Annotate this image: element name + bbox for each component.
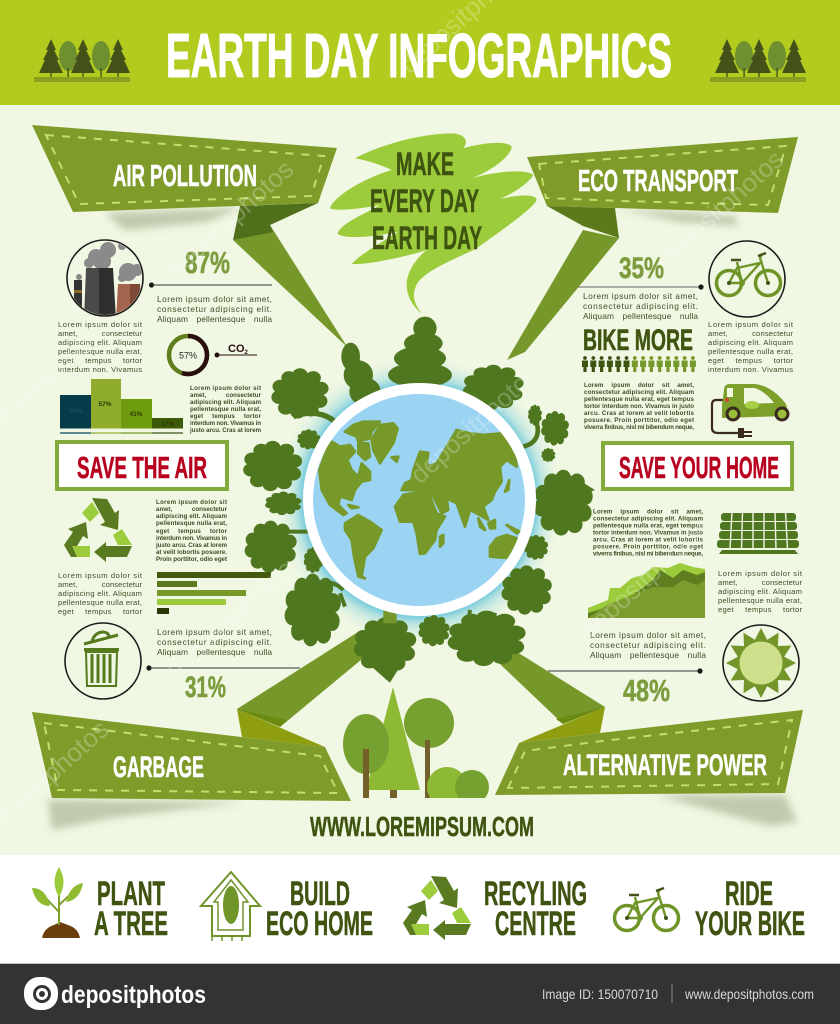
tree: left small — [265, 492, 302, 515]
leader line: 35% — [578, 284, 704, 290]
icon: bicycle circle — [709, 241, 785, 317]
text: recycle paragraph: Proin porttitor, odio eget — [156, 556, 227, 563]
text: garbage stat paragraph — [157, 627, 272, 657]
text: bicycle side paragraph — [708, 320, 794, 374]
text: recycle paragraph: eget tempus tortor — [156, 528, 228, 535]
continents — [319, 422, 520, 578]
label: build eco home — [266, 875, 373, 943]
bar chart: air: 17% — [161, 421, 175, 428]
brand name: depositphotos — [61, 981, 206, 1009]
text: factory paragraph: Lorem ipsum dolor sit — [58, 320, 143, 329]
tree: bottom right wide — [448, 610, 526, 666]
text: garbage paragraph: amet, consectetur — [58, 580, 142, 589]
ribbon: alternative power tail — [480, 645, 605, 743]
text: CO2 paragraph: Lorem ipsum dolor sit — [190, 385, 261, 392]
text: home paragraph — [593, 508, 704, 558]
heading: bike more: BIKE MORE — [583, 324, 693, 357]
tree: upper left narrow — [341, 343, 381, 406]
text: power paragraph: Aliquam pellentesque nulla — [590, 650, 706, 660]
tree: right large — [534, 470, 595, 536]
label: build eco home: BUILD — [290, 875, 350, 913]
text: home paragraph: posuere. Proin porttitor, odio eget — [593, 544, 703, 550]
icon: recycle — [64, 498, 132, 562]
text: CO2 paragraph: amet, consectetur — [190, 392, 262, 399]
leader line: 31% — [146, 665, 300, 671]
banner: alternative power — [495, 710, 803, 795]
text: transport paragraph — [583, 291, 698, 321]
text: home paragraph: consectetur adipiscing elit. Aliquam — [593, 516, 703, 522]
text: garbage paragraph: eget tempus tortor — [58, 607, 142, 616]
watermarks: depositphotos — [159, 554, 299, 684]
banner: air pollution: AIR POLLUTION — [113, 158, 257, 193]
icon: trash can — [65, 623, 141, 699]
tree: right small — [523, 405, 569, 462]
tree: small bush left — [297, 429, 320, 449]
banner shadows — [48, 208, 797, 830]
stat: 31%: 31% — [185, 671, 226, 704]
slogan: EARTH DAY — [372, 220, 482, 256]
text: transport paragraph: consectetur adipiscing elit. — [583, 301, 698, 311]
bar chart: air: 57% — [98, 401, 112, 408]
tree: left large — [243, 441, 302, 491]
text: CO2 paragraph: eget tempus tortor — [190, 413, 262, 420]
leader line: 87% — [149, 282, 272, 288]
globe — [303, 383, 536, 616]
icon: header trees left — [34, 39, 130, 82]
text: chart side paragraph: adipiscing elit. Aliquam — [718, 587, 802, 596]
text: recycle paragraph: interdum non. Vivamus in — [156, 535, 227, 542]
tree: small lower left — [304, 547, 323, 573]
text: factory paragraph: interdum non. Vivamus — [58, 365, 142, 374]
icon: header trees right — [710, 39, 806, 82]
text: chart side paragraph: Lorem ipsum dolor sit — [718, 569, 803, 578]
text: air paragraph: Aliquam pellentesque nulla — [157, 314, 272, 324]
text: bike paragraph: consectetur adipiscing elit. Aliquam — [584, 389, 694, 396]
text: home paragraph: pellentesque nulla erat, eget tempus — [593, 522, 704, 530]
text: bike paragraph: Lorem ipsum dolor sit amet, — [584, 382, 694, 389]
text: bike paragraph: tortor interdum non. Vivamus in justo — [584, 403, 694, 410]
callout: save the air — [57, 442, 227, 489]
tree: upper left gnarled — [271, 368, 337, 423]
text: bicycle side paragraph: amet, consectetur — [708, 329, 793, 338]
text: transport paragraph: Lorem ipsum dolor sit amet, — [583, 291, 698, 301]
text: garbage paragraph: pellentesque nulla erat, — [58, 598, 142, 607]
text: air paragraph: Lorem ipsum dolor sit amet, — [157, 294, 272, 304]
forest ring around globe — [243, 317, 595, 683]
text: bike paragraph — [584, 382, 695, 431]
tree: upper right — [463, 365, 524, 410]
text: chart side paragraph: eget tempus tortor — [718, 605, 802, 614]
donut chart: 57%: 57% — [179, 350, 197, 360]
tree: bottom left gnarled — [285, 574, 345, 646]
icon: bike — [614, 888, 678, 930]
text: recycle paragraph: at velit lobortis posuere. — [156, 549, 227, 556]
text: air paragraph: consectetur adipiscing elit. — [157, 304, 272, 314]
text: recycle paragraph: Lorem ipsum dolor sit — [156, 499, 227, 506]
text: bicycle side paragraph: Lorem ipsum dolor sit — [708, 320, 794, 329]
icon: sun — [723, 625, 799, 701]
tree: small right — [524, 535, 548, 560]
leader line: 48% — [548, 668, 703, 674]
ribbon: air pollution tail — [233, 203, 365, 375]
text: bicycle side paragraph: adipiscing elit. Aliquam — [708, 338, 793, 347]
label: recycling centre: CENTRE — [495, 905, 576, 943]
text: CO2 paragraph: interdum non. Vivamus in — [190, 420, 261, 427]
text: chart side paragraph — [718, 569, 803, 614]
text: recycle paragraph: adipiscing elit. Aliquam — [156, 513, 227, 520]
watermarks — [0, 0, 789, 844]
panel: bottom action strip — [0, 855, 840, 963]
text: bike paragraph: viverra finibus, nisl mi bibendum neque, — [584, 424, 694, 431]
text: CO2 paragraph: pellentesque nulla erat, — [190, 406, 261, 413]
label: plant a tree: A TREE — [94, 905, 168, 943]
watermarks: depositphotos — [574, 514, 714, 644]
tree: bottom small — [418, 615, 450, 646]
label: ride your bike — [695, 875, 805, 943]
tree: lower right — [502, 565, 552, 615]
label: ride your bike: RIDE — [725, 875, 773, 913]
text: garbage stat paragraph: Lorem ipsum dolor sit amet, — [157, 627, 272, 637]
text: power paragraph — [590, 630, 706, 660]
text: bicycle side paragraph: interdum non. Vivamus — [708, 365, 793, 374]
text: transport paragraph: Aliquam pellentesque nulla — [583, 311, 698, 321]
icon: electric car — [712, 384, 790, 438]
label: CO2: 2 — [244, 350, 248, 356]
text: power paragraph: Lorem ipsum dolor sit amet, — [590, 630, 706, 640]
tree: lower left — [245, 521, 308, 573]
stat: 35%: 35% — [619, 252, 664, 285]
banner: garbage — [32, 712, 351, 801]
text: bike paragraph: pellentesque nulla erat, eget tempus — [584, 396, 695, 403]
bar chart: air — [60, 379, 183, 434]
text: CO2 paragraph — [189, 385, 262, 434]
callout: save the air: SAVE THE AIR — [77, 450, 207, 485]
text: recycle paragraph — [155, 499, 228, 563]
icon: solar panel — [717, 512, 799, 554]
label: plant a tree — [94, 875, 168, 943]
text: factory paragraph: pellentesque nulla erat, — [58, 347, 142, 356]
bar chart: air: 45% — [69, 408, 83, 415]
icon: eco home — [201, 872, 260, 941]
text: factory paragraph: adipiscing elit. Aliquam — [58, 338, 142, 347]
slogan — [370, 146, 482, 256]
text: recycle paragraph: justo arcu. Cras at lorem — [155, 542, 227, 549]
text: CO2 paragraph: adipiscing elit. Aliquam — [190, 399, 261, 406]
text: CO2 paragraph: justo arcu. Cras at lorem — [189, 427, 261, 434]
header band — [0, 0, 840, 105]
text: factory paragraph: amet, consectetur — [58, 329, 142, 338]
callout: save your home — [603, 443, 792, 489]
tree: bottom centre — [354, 610, 416, 683]
bar chart: horizontal — [157, 572, 271, 614]
pictogram: people row — [582, 356, 696, 372]
text: bicycle side paragraph: eget tempus tortor — [708, 356, 793, 365]
text: recycle paragraph: pellentesque nulla erat, — [156, 520, 227, 527]
bar chart: air: 41% — [129, 411, 143, 418]
website: www.depositphotos.com — [684, 986, 814, 1002]
label: plant a tree: PLANT — [97, 875, 165, 913]
label: recycling centre — [484, 875, 587, 943]
image id: Image ID: 150070710 — [542, 986, 658, 1002]
text: chart side paragraph: pellentesque nulla erat, — [718, 596, 802, 605]
banner: air pollution — [32, 125, 337, 212]
label: recycling centre: RECYLING — [484, 875, 587, 913]
text: home paragraph: tortor interdum non. Vivamus in justo — [593, 530, 703, 536]
text: home paragraph: Lorem ipsum dolor sit amet, — [593, 508, 703, 516]
banner: eco transport: ECO TRANSPORT — [578, 163, 738, 198]
text: home paragraph: arcu. Cras at lorem at velit lobortis — [593, 536, 704, 544]
stat: 87%: 87% — [185, 245, 230, 280]
text: garbage stat paragraph: consectetur adipiscing elit. — [157, 637, 272, 647]
icon: camera logo — [24, 977, 58, 1010]
label: CO2: CO — [228, 343, 244, 355]
banner: eco transport — [527, 137, 798, 213]
text: garbage paragraph: Lorem ipsum dolor sit — [58, 571, 143, 580]
label: build eco home: ECO HOME — [266, 905, 373, 943]
slogan: EVERY DAY — [370, 183, 479, 219]
icon: plant — [32, 867, 83, 938]
slogan: MAKE — [396, 146, 454, 182]
text: air paragraph — [157, 294, 272, 324]
donut chart: 57% — [169, 336, 207, 374]
label: CO2 — [214, 343, 257, 358]
text: home paragraph: viverra finibus, nisl mi bibendum neque, — [593, 550, 703, 558]
banner: garbage: GARBAGE — [113, 751, 204, 784]
text: factory paragraph — [58, 320, 143, 374]
ribbon: garbage tail — [237, 632, 385, 747]
text: bike paragraph: posuere. Proin porttitor, odio eget — [584, 417, 694, 424]
text: factory paragraph: eget tempus tortor — [58, 356, 142, 365]
website url: WWW.LOREMIPSUM.COM — [310, 811, 534, 842]
ribbon: eco transport tail — [507, 206, 619, 360]
speech cloud — [330, 133, 537, 313]
text: bicycle side paragraph: pellentesque nulla erat, — [708, 347, 793, 356]
stat: 48%: 48% — [623, 673, 670, 708]
icon: recycling — [403, 876, 471, 940]
area chart — [588, 563, 705, 618]
text: bike paragraph: arcu. Cras at lorem at velit lobortis — [584, 410, 695, 417]
watermarks: depositphotos — [649, 144, 789, 274]
text: power paragraph: consectetur adipiscing elit. — [590, 640, 706, 650]
text: chart side paragraph: amet, consectetur — [718, 578, 802, 587]
icon: factory circle — [67, 240, 143, 320]
watermarks: depositphotos — [159, 154, 299, 284]
icon: bottom trees — [343, 687, 489, 807]
watermarks: depositphotos — [404, 359, 544, 489]
tree: top conifer — [388, 317, 452, 388]
panel: footer bar — [0, 963, 840, 1024]
text: garbage paragraph — [58, 571, 143, 616]
text: garbage paragraph: adipiscing elit. Aliquam — [58, 589, 142, 598]
text: garbage stat paragraph: Aliquam pellentesque nulla — [157, 647, 272, 657]
globe glow — [273, 354, 565, 646]
text: recycle paragraph: amet, consectetur — [156, 506, 228, 513]
